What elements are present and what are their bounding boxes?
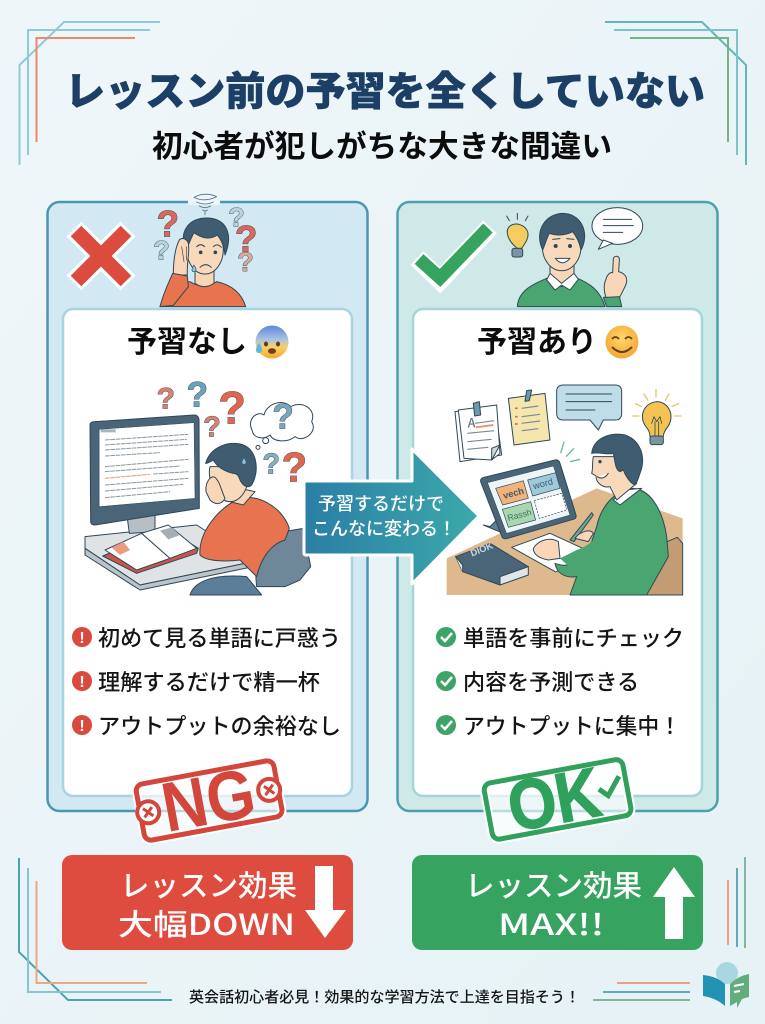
problem item 2: 理解するだけで精一杯	[98, 665, 320, 697]
emoji: anxious sweat face	[256, 326, 288, 358]
stamp: NG	[130, 749, 287, 852]
icon: logo book with chat	[703, 962, 749, 1008]
arrow callout	[304, 449, 479, 584]
illustration: studying on tablet: vech	[502, 486, 525, 501]
inner white card left	[63, 309, 352, 796]
corner lines top right	[605, 22, 746, 165]
title: レッスン前の予習を全くしていない	[65, 59, 705, 117]
illustration: studying on tablet	[447, 385, 683, 595]
problem item 3: アウトプットの余裕なし	[98, 709, 341, 741]
stamp: OK: OK	[502, 753, 606, 846]
problem item 1: !	[79, 630, 85, 647]
corner lines top left	[20, 22, 160, 165]
illustration: studying on tablet: word	[531, 476, 554, 492]
illustration: struggling at computer: ?	[218, 382, 246, 433]
subtitle: 初心者が犯しがちな大きな間違い	[152, 122, 612, 166]
result bar: up	[412, 855, 703, 950]
result bar: down: レッスン効果	[120, 863, 297, 905]
illustration: studying on tablet: A	[468, 412, 476, 431]
panel: without preparation	[48, 194, 368, 811]
illustration: confused student: ?	[153, 235, 170, 265]
arrow callout: こんなに変わる！	[312, 515, 456, 541]
list: benefits	[436, 621, 684, 741]
illustration: struggling at computer: ?	[282, 444, 307, 491]
illustration: confused student: ?	[235, 219, 257, 260]
corner lines bottom left	[19, 858, 172, 1000]
heading: 予習なし: 予習なし	[127, 317, 247, 361]
arrow callout: 予習するだけで	[318, 490, 444, 516]
illustration: struggling at computer	[85, 376, 313, 595]
icon: green check	[417, 227, 490, 280]
footer text: 英会話初心者必見！効果的な学習方法で上達を目指そう！	[189, 986, 580, 1007]
stamp: NG: NG	[156, 753, 261, 847]
problem item 1: 初めて見る単語に戸惑う	[98, 621, 341, 653]
illustration: struggling at computer: ?	[203, 412, 221, 444]
inner white card right	[413, 309, 702, 796]
illustration: struggling at computer: ?	[272, 397, 294, 436]
heading: 予習あり: 予習あり	[477, 317, 597, 361]
result bar: up: MAX!!	[498, 902, 604, 944]
panel background left	[48, 202, 368, 811]
result bar: down: 大幅DOWN	[118, 902, 295, 944]
illustration: struggling at computer: ?	[157, 382, 175, 415]
illustration: confused student: ?	[237, 247, 254, 277]
panel background right	[398, 202, 718, 811]
problem item 3: !	[79, 718, 85, 735]
result bar: down	[62, 855, 353, 950]
illustration: studying on tablet: Rassh	[506, 507, 533, 523]
result bar: up: レッスン効果	[465, 863, 642, 905]
problem item 2: !	[79, 674, 85, 691]
illustration: happy student	[507, 208, 643, 307]
benefit item 2: 内容を予測できる	[463, 665, 639, 697]
panel: with preparation	[398, 202, 718, 811]
panel top gap	[188, 199, 220, 205]
benefit item 3: アウトプットに集中！	[463, 709, 681, 741]
list: problems	[72, 621, 341, 741]
benefit item 1: 単語を事前にチェック	[463, 621, 684, 653]
illustration: struggling at computer: ?	[187, 376, 208, 415]
illustration: struggling at computer: ?	[263, 448, 280, 480]
icon: up arrow	[653, 867, 695, 939]
illustration: confused student	[153, 194, 257, 307]
corner lines bottom right	[593, 857, 745, 1000]
illustration: studying on tablet: DIOK	[469, 540, 495, 559]
illustration: confused student: ?	[157, 204, 179, 245]
emoji: smiling face	[606, 326, 638, 358]
icon: red cross	[74, 229, 128, 283]
illustration: confused student: ?	[228, 203, 245, 233]
icon: down arrow	[305, 866, 346, 938]
